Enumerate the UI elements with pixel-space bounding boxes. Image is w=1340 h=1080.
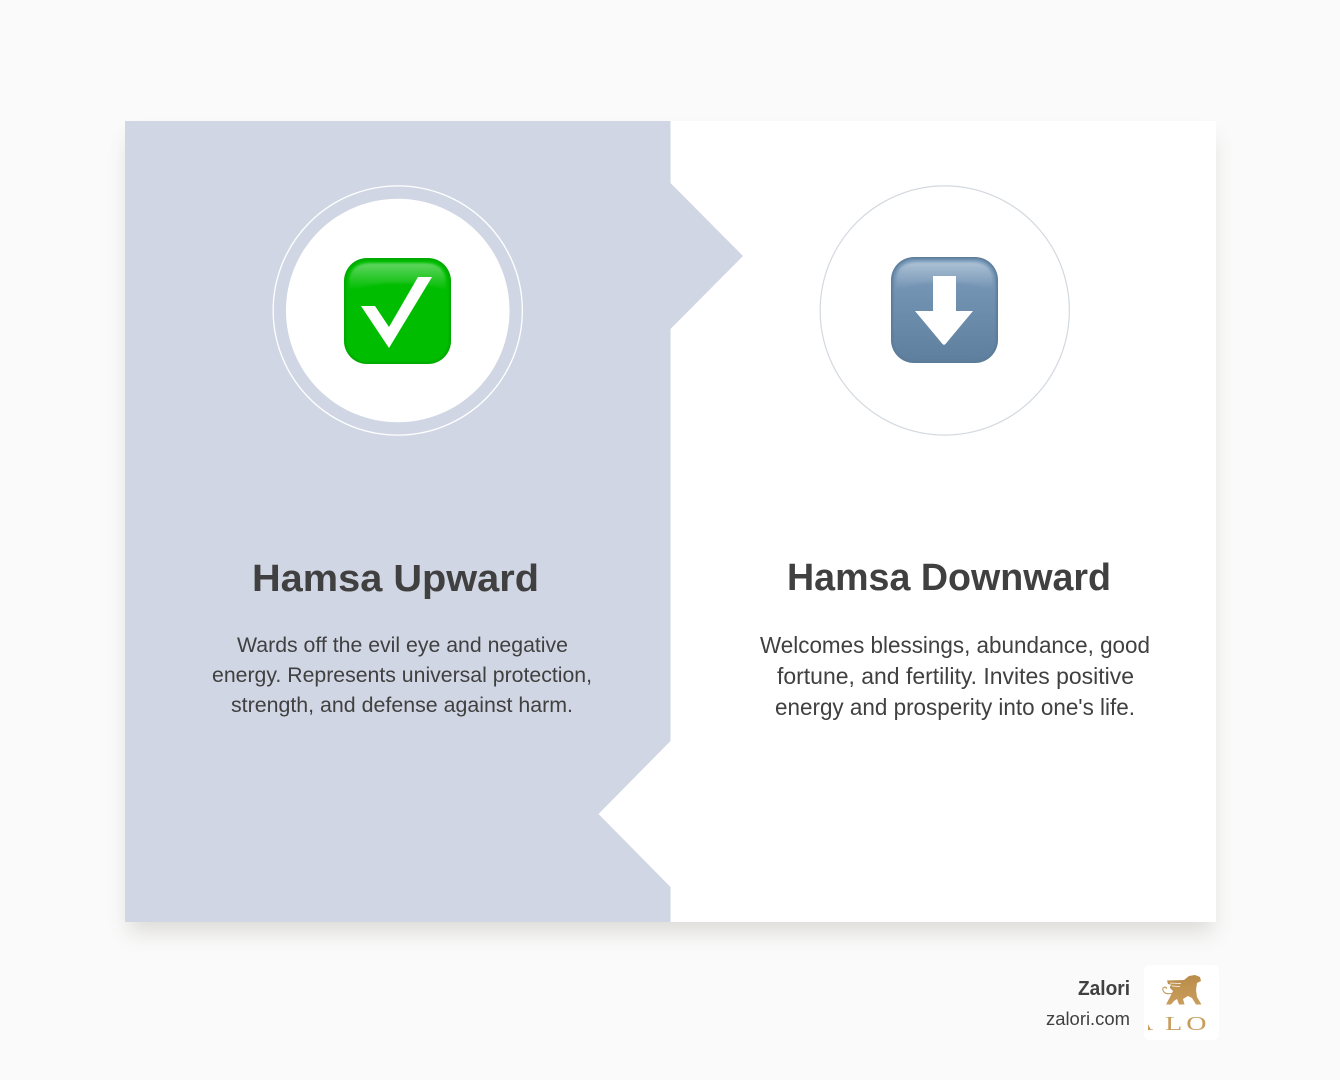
text block: downward description: Welcomes blessings, abundance, good [760, 632, 1150, 658]
logo [1148, 975, 1206, 1030]
text block: downward description: fortune, and fertility. Invites positive [777, 663, 1134, 689]
brand name: Zalori [1078, 978, 1130, 1000]
panel: hamsa upward background [125, 121, 743, 922]
text block: downward description [760, 632, 1150, 720]
heading: hamsa downward: Hamsa Downward [787, 557, 1111, 599]
logo lettering: ALO [1133, 1013, 1206, 1035]
icon: green check mark [344, 258, 451, 364]
icon: down arrow [891, 257, 998, 363]
brand url: zalori.com [1046, 1009, 1130, 1029]
icon circle: downward [820, 186, 1069, 435]
text block: downward description: energy and prosperity into one's life. [775, 694, 1135, 720]
text block: upward description: Wards off the evil eye and negative [237, 633, 568, 657]
text block: upward description [212, 633, 592, 717]
icon: winged lion [1163, 975, 1202, 1004]
infographic [125, 121, 1206, 1030]
icon circle: upward [273, 186, 522, 435]
card background [125, 121, 1216, 922]
text block: upward description: energy. Represents universal protection, [212, 663, 592, 687]
heading: hamsa upward: Hamsa Upward [252, 558, 539, 600]
text block: upward description: strength, and defense against harm. [231, 693, 573, 717]
